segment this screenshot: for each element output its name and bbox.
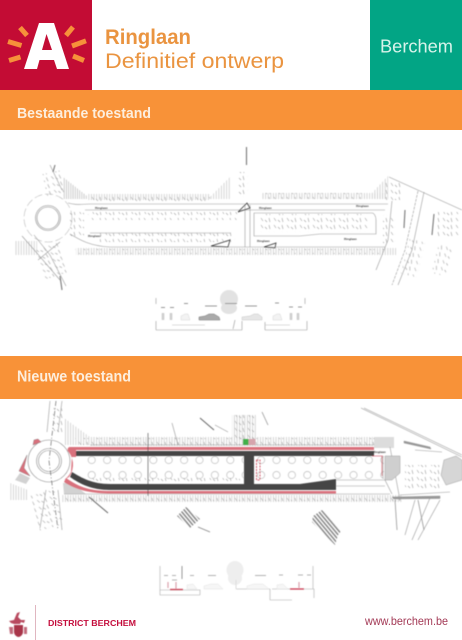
icon: orange rays [8, 27, 86, 60]
title line: Definitief ontwerp: Definitief ontwerp [105, 50, 284, 73]
title line: Ringlaan: Ringlaan [105, 26, 191, 49]
road edge and rail lines [40, 401, 462, 540]
green bike sign [243, 439, 256, 445]
section lines [160, 566, 314, 600]
tree rows [84, 453, 384, 483]
heading band: Bestaande toestand: Bestaande toestand [17, 106, 151, 122]
direction arrows [211, 203, 276, 248]
hatched frontage strips [15, 176, 396, 255]
cars [181, 314, 282, 320]
street labels: Ringlaan [257, 239, 270, 243]
parking and detail marks [36, 170, 459, 279]
district name: DISTRICT BERCHEM [48, 619, 136, 628]
section lines [156, 298, 307, 330]
cross-section: existing situation [156, 290, 307, 330]
street labels: Ringlaan [344, 237, 357, 241]
street labels: Ringlaan [88, 234, 101, 238]
cars [187, 584, 288, 589]
crossing structures [385, 441, 462, 499]
axis line [49, 401, 58, 530]
street name label: Ringlaan [373, 450, 386, 454]
heading band: Nieuwe toestand: Nieuwe toestand [17, 368, 131, 386]
detail marks [31, 408, 443, 530]
dimension labels [161, 303, 302, 308]
district panel: Berchem [370, 0, 462, 90]
section annotation blocks [89, 412, 424, 545]
red cyclist marks [168, 582, 299, 589]
logo panel: Antwerpen A [0, 0, 92, 90]
grey pavement areas [15, 473, 86, 494]
new road surfaces [64, 447, 374, 494]
dimension labels [164, 575, 311, 580]
roundabout [24, 194, 72, 242]
footer [9, 605, 448, 640]
street labels: Ringlaan [95, 206, 108, 210]
tree [226, 561, 244, 585]
heading band: Nieuwe toestand [0, 356, 462, 399]
red kerb outline [372, 456, 383, 476]
cross-section: new situation [160, 561, 314, 600]
street labels: Ringlaan [259, 206, 272, 210]
street labels [88, 204, 369, 243]
divider [34, 605, 37, 640]
plan: new situation [10, 401, 462, 545]
roundabout cycle path [64, 449, 73, 480]
heading band: Bestaande toestand [0, 90, 462, 130]
street labels: Ringlaan [356, 204, 369, 208]
icon: letter A [24, 23, 69, 69]
roundabout [28, 440, 70, 482]
hatched frontage strips [10, 415, 402, 502]
icon: coat of arms [9, 612, 27, 637]
tree [220, 290, 238, 314]
red cycle path in section [170, 588, 304, 590]
vertical street names [53, 147, 434, 290]
pedestrians [163, 313, 298, 320]
red parking outline [256, 460, 260, 480]
road lines [22, 165, 462, 286]
website: www.berchem.be [364, 614, 448, 628]
title [105, 26, 284, 73]
district panel: Berchem: Berchem [380, 36, 453, 56]
plan: existing situation [15, 147, 462, 290]
west cycle path [19, 439, 41, 476]
